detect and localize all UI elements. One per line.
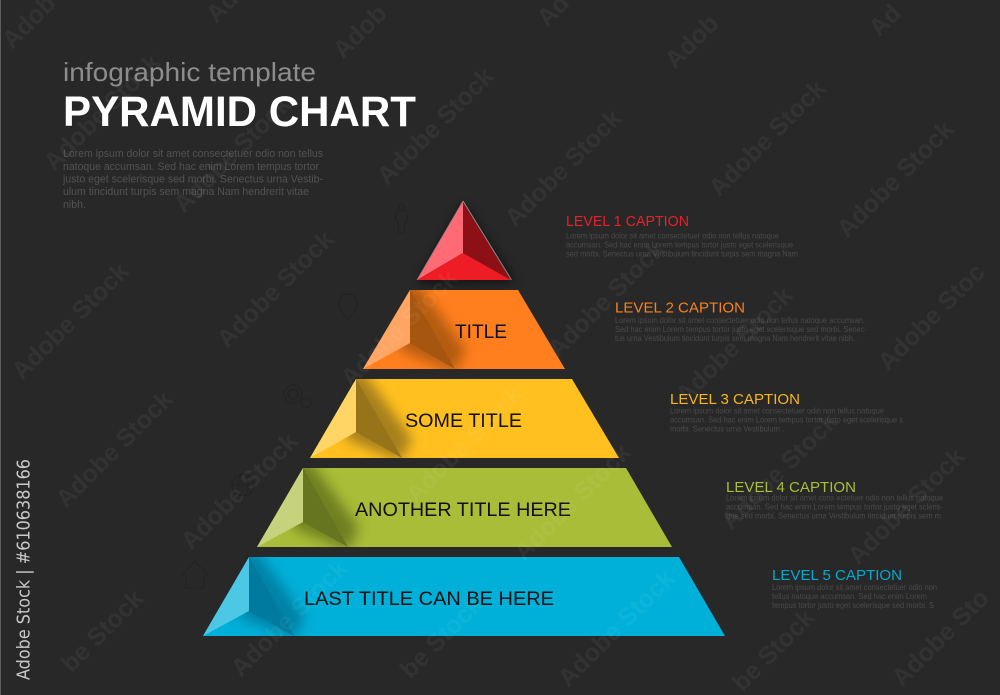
caption: level 4: accumsan. Sed hac enim Lorem tempus tortor justo eget scleris- xyxy=(726,502,943,512)
watermark pattern: Ad xyxy=(863,0,907,42)
caption: level 2: tus urna Vestibulum tincidunt turpis sem magna Nam hendrerit vitae nibh.. xyxy=(615,333,857,343)
label: SOME TITLE xyxy=(405,411,522,432)
watermark pattern: Adobe Stock xyxy=(499,104,627,232)
caption: level 1 xyxy=(566,214,798,258)
icon: house xyxy=(181,561,209,588)
watermark pattern: be Stock xyxy=(395,590,488,684)
watermark pattern: Adob xyxy=(659,9,724,74)
watermark pattern: Adobe Stock xyxy=(371,62,499,190)
caption: level 5: tellus natoque accumsan. Sed hac enim Lorem xyxy=(772,591,927,601)
intro text: Lorem ipsum dolor sit amet consectetuer odio non tellus xyxy=(63,148,323,160)
watermark pattern: Adobe Stock xyxy=(715,407,843,535)
icon: person xyxy=(396,204,408,233)
watermark pattern: Adob xyxy=(327,0,392,64)
intro text: nibh. xyxy=(63,199,86,211)
stock id label: Adobe Stock | #610638166 xyxy=(14,459,34,680)
caption: level 1: Lorem ipsum dolor sit amet consectetuer odio non tellus natoque xyxy=(566,230,779,240)
watermark pattern: Adobe Stock xyxy=(703,74,831,202)
level 5: blue band xyxy=(203,557,725,636)
watermark pattern: Adobe Stock xyxy=(842,442,970,570)
watermark pattern: Adobe Stock xyxy=(38,48,166,176)
caption: level 2: Sed hac enim Lorem tempus tortor justo eget scelerisque sed morbi. Senec- xyxy=(615,324,867,334)
caption: level 4: LEVEL 4 CAPTION xyxy=(726,480,856,496)
icon: globe xyxy=(232,474,254,496)
label: LAST TITLE CAN BE HERE xyxy=(304,589,554,610)
watermark pattern: Adobe Sto xyxy=(886,584,995,692)
intro text: natoque accumsan. Sed hac enim Lorem tempus tortor xyxy=(63,161,319,173)
label: ANOTHER TITLE HERE xyxy=(355,500,571,521)
caption: level 5 xyxy=(772,568,937,610)
icon: map pin xyxy=(339,294,357,319)
watermark pattern: Adobe Stock xyxy=(225,554,353,682)
title: PYRAMID CHART xyxy=(63,88,416,136)
watermark pattern: Adobe Stock xyxy=(6,257,134,385)
watermark pattern: Adobe Stock xyxy=(211,225,339,353)
caption: level 1: sed morbi. Senectus urna Vestibulum tincidunt turpis sem magna Nam xyxy=(566,248,798,258)
caption: level 4: que sed morbi. Senectus urna Vestibulum tincidunt turpis sem m xyxy=(726,510,941,520)
caption: level 2: Lorem ipsum dolor sit amet consectetuer odio non tellus natoque accumsan. xyxy=(615,315,865,325)
intro text: justo eget scelerisque sed morbi. Senectus urna Vestib- xyxy=(62,174,323,186)
watermark pattern: Adobe Stock xyxy=(168,90,296,218)
watermark pattern: Adobe Stock xyxy=(175,427,303,555)
caption: level 3: LEVEL 3 CAPTION xyxy=(670,392,800,408)
faint outline icons xyxy=(181,204,408,588)
caption: level 1: accumsan. Sed hac enim Lorem tempus tortor justo eget scelerisque xyxy=(566,240,793,250)
caption: level 4: Lorem ipsum dolor sit amet cons ectetuer odio non tellus natoque xyxy=(726,492,943,502)
caption: level 3: Lorem ipsum dolor sit amet consectetuer odio non tellus natoque xyxy=(670,406,884,416)
watermark pattern: Adobe Stock xyxy=(831,115,959,243)
caption: level 3: morbi. Senectus urna Vestibulum . xyxy=(670,424,784,434)
caption: level 2 xyxy=(615,300,867,343)
watermark pattern: Adobe Stock xyxy=(50,385,178,513)
watermark pattern: Adobe Stock xyxy=(542,235,670,363)
watermark pattern: Adobe Stock xyxy=(508,438,636,566)
intro text: ulum tincidunt turpis sem magna Nam hendrerit vitae xyxy=(63,186,309,198)
caption: level 3: accumsan. Sed hac enim Lorem tempus tortor justo eget scelerisque s xyxy=(670,414,903,424)
level 3: yellow band xyxy=(310,379,619,458)
watermark pattern: be Stock xyxy=(56,584,149,678)
label: TITLE xyxy=(455,322,507,343)
watermark pattern: Adobe Stock xyxy=(335,264,463,392)
icon: gears xyxy=(284,385,311,408)
watermark pattern: Adobe Stock xyxy=(400,380,528,508)
pyramid chart xyxy=(203,201,725,639)
intro text xyxy=(62,148,323,211)
subtitle: infographic template xyxy=(63,57,316,87)
watermark pattern: Adobe Stock xyxy=(552,564,680,692)
caption: level 2: LEVEL 2 CAPTION xyxy=(615,300,745,316)
watermark pattern: be Stock xyxy=(727,603,820,695)
watermark pattern: Adobe Stock xyxy=(670,281,798,409)
caption: level 5: tempus tortor justo eget scelerisque sed morbi. S xyxy=(772,600,934,610)
level 2: orange band xyxy=(363,290,565,369)
level 4: green band xyxy=(257,468,672,547)
caption: level 5: Lorem ipsum dolor sit amet consectetuer odio non xyxy=(772,582,937,592)
caption: level 3 xyxy=(670,392,903,434)
header: title block xyxy=(62,57,416,211)
caption: level 1: LEVEL 1 CAPTION xyxy=(566,214,689,230)
caption: level 4 xyxy=(726,480,943,520)
watermark pattern: Adobe Stoc xyxy=(872,258,991,376)
caption: level 5: LEVEL 5 CAPTION xyxy=(772,568,902,584)
level 1: top triangle xyxy=(417,201,516,284)
